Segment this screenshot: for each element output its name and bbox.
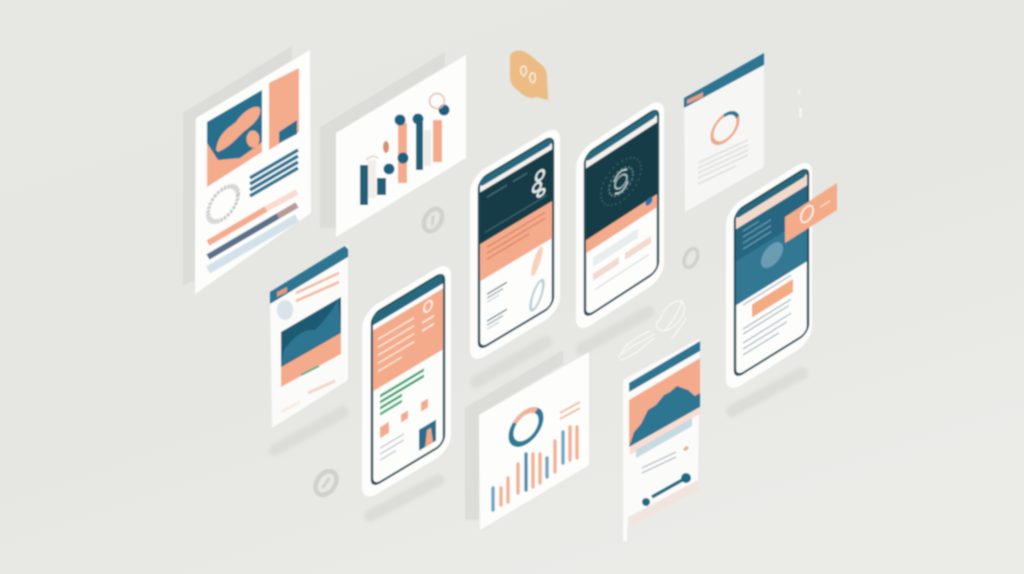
panel: donut and bar chart card: [465, 350, 589, 530]
panel: phone blue screen: [726, 156, 812, 395]
green lines: [380, 370, 424, 414]
legend lines: [560, 402, 580, 419]
photo block: [281, 297, 341, 387]
footer lines: [281, 381, 335, 412]
screen sections: [480, 137, 552, 281]
chain icon: [533, 168, 544, 201]
ring: [712, 107, 738, 149]
orange squares: [380, 398, 428, 438]
dotted ring: [208, 180, 238, 228]
map block: [207, 90, 262, 187]
screen sections: [373, 273, 443, 391]
avatar: [277, 300, 293, 320]
floor shadows: [275, 312, 802, 516]
text lines: [698, 140, 748, 184]
chain icon: [422, 298, 434, 331]
screen sections: [736, 168, 807, 305]
panel: phone orange with green bars: [362, 260, 451, 503]
text lines: [743, 275, 791, 355]
blue text lines: [250, 150, 298, 196]
panel: bar chart card: [320, 52, 466, 237]
form rows: [593, 220, 651, 292]
grey lines: [380, 434, 404, 460]
progress row: [636, 418, 692, 458]
panel: left document card: [270, 244, 348, 428]
orange column: [269, 68, 299, 150]
faded foot: [631, 480, 698, 527]
menu lines: [743, 214, 771, 249]
panel: phone dark header with orange band: [470, 123, 560, 365]
heading lines: [296, 273, 339, 301]
bars: [493, 427, 577, 510]
callout: orange floating card: [785, 183, 837, 243]
white text lines: [378, 318, 414, 371]
orange button: [752, 279, 793, 317]
green line: [301, 366, 319, 375]
icon: sparkle marks: [798, 90, 802, 118]
blue dot: [646, 196, 652, 207]
icon: chat bubble: [510, 50, 548, 100]
icon: grey chain 1: [420, 206, 446, 234]
screen sections: [586, 109, 657, 253]
icon: white squiggles: [619, 300, 686, 360]
panel: bottom area chart screen: [623, 338, 700, 541]
all artwork: [183, 46, 837, 541]
panel: browser ring card: [684, 53, 764, 212]
donut: [511, 404, 541, 450]
horizontal bars: [208, 192, 297, 270]
leaf icons: [528, 242, 546, 315]
icon: grey ring 2: [681, 246, 701, 270]
chart bars: [360, 94, 450, 205]
text lines: [485, 161, 547, 330]
panel: phone dark network screen: [576, 96, 664, 335]
text lines: [642, 452, 676, 473]
thumbnail: [419, 420, 436, 451]
icon: grey chain 3: [311, 467, 341, 499]
network glyph: [601, 149, 641, 215]
slider: [642, 473, 691, 506]
cloud icon: [761, 237, 783, 273]
panel: infographic poster: [183, 46, 311, 294]
